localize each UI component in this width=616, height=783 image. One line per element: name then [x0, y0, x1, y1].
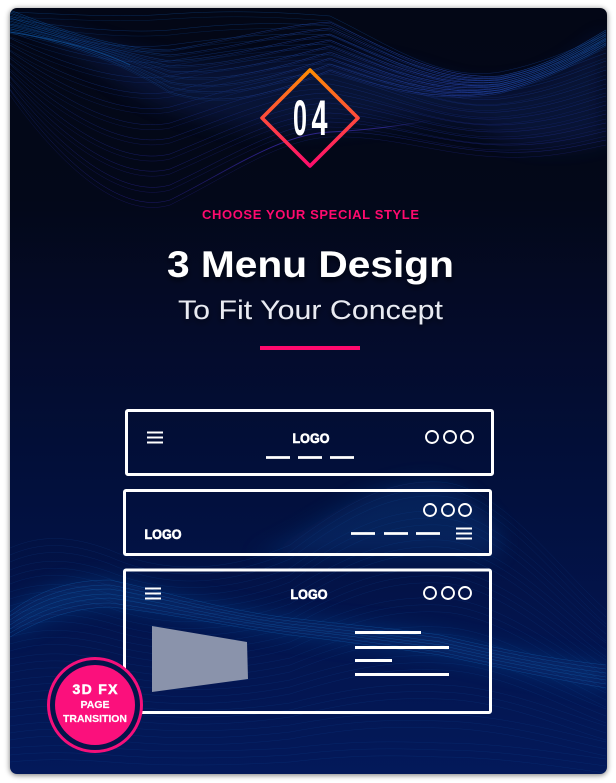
diamond outline — [262, 70, 358, 166]
badge: 3D FX page transition — [48, 658, 142, 752]
panel: menu layout 3 — [124, 570, 490, 712]
logo: LOGO — [144, 527, 182, 542]
nav dashes — [351, 532, 440, 535]
circles — [424, 504, 471, 516]
number 04: 0 — [293, 90, 307, 146]
circles — [424, 587, 471, 599]
perspective image placeholder — [152, 626, 248, 692]
bottom wave mesh — [10, 481, 606, 773]
nav dashes — [266, 456, 354, 459]
badge text — [63, 681, 127, 725]
subheading: To Fit Your Concept — [178, 295, 444, 325]
main heading: 3 Menu Design — [167, 244, 454, 285]
hamburger icon — [456, 528, 472, 538]
hamburger icon — [147, 432, 163, 442]
panel: menu layout 1 — [126, 410, 492, 474]
badge text: TRANSITION — [63, 713, 127, 725]
number 04: 4 — [312, 90, 328, 146]
logo: LOGO — [290, 587, 328, 602]
badge text: 3D FX — [72, 681, 118, 697]
text lines — [355, 632, 449, 674]
hamburger icon — [145, 588, 161, 598]
logo: LOGO — [292, 431, 330, 446]
circles — [426, 431, 473, 443]
badge text: PAGE — [80, 699, 110, 711]
pink divider — [260, 346, 360, 350]
top wave mesh — [10, 10, 606, 207]
diamond badge with number — [262, 70, 358, 166]
eyebrow text: CHOOSE YOUR SPECIAL STYLE — [202, 207, 419, 222]
panel: menu layout 2 — [124, 490, 490, 554]
